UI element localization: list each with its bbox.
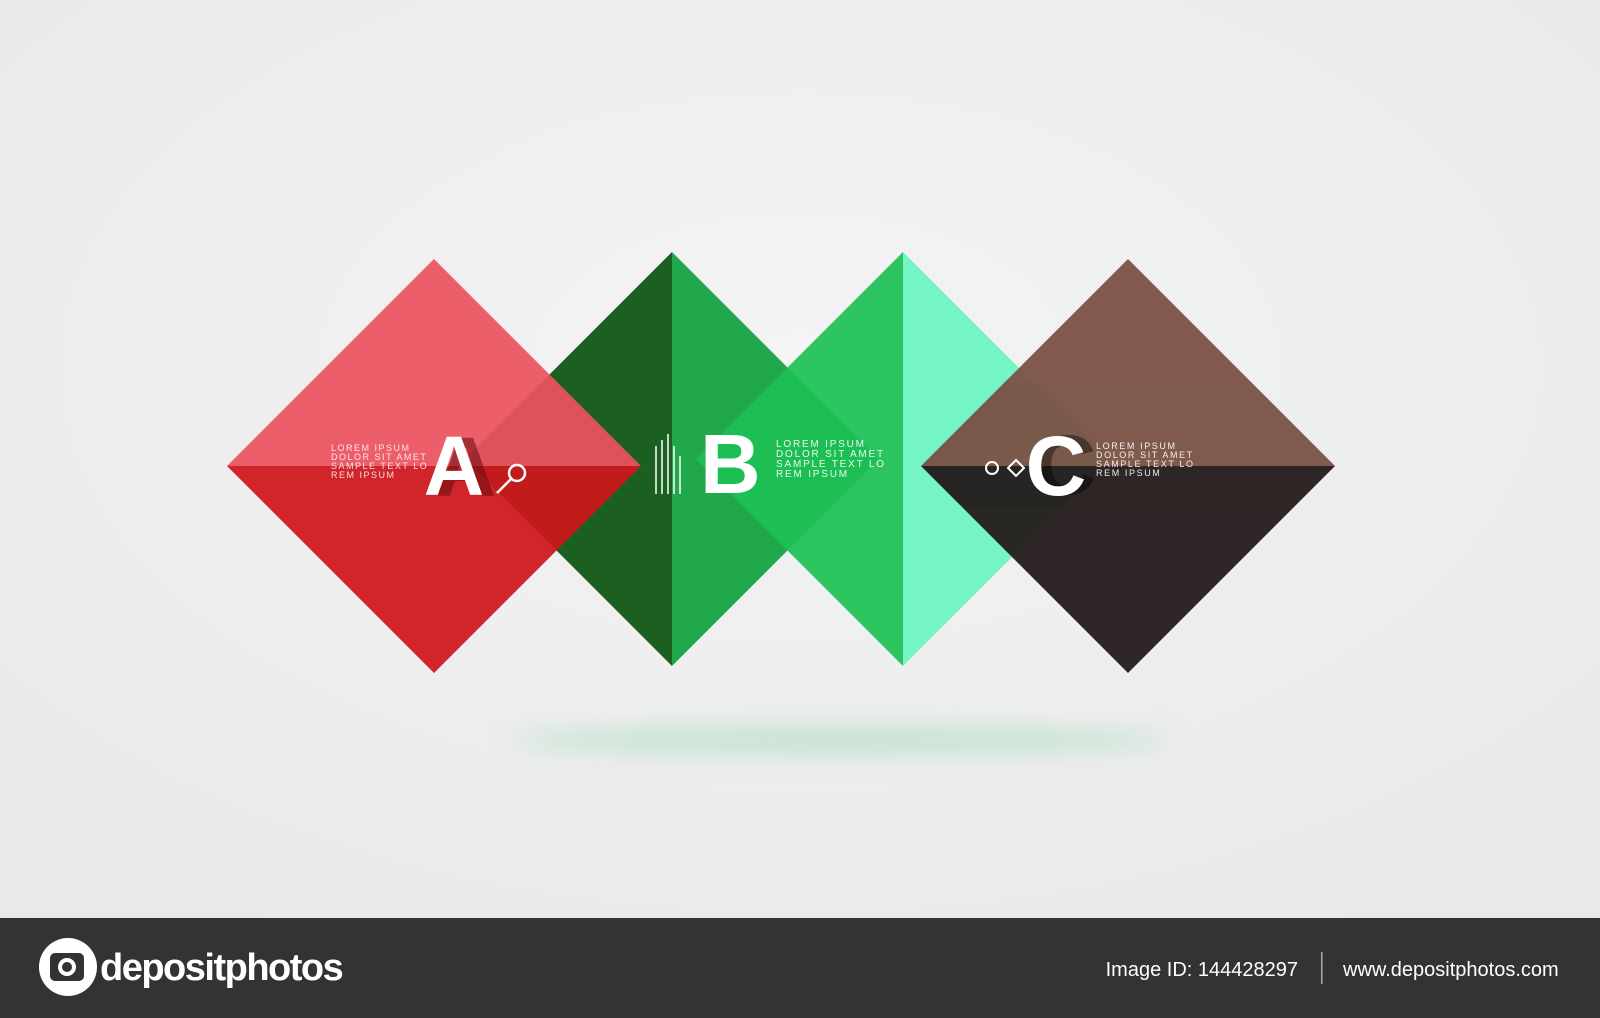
label B block: B bbox=[700, 417, 761, 511]
label B block: LOREM IPSUM bbox=[776, 439, 866, 450]
floor shadow bbox=[510, 726, 1170, 754]
label C block: DOLOR SIT AMET bbox=[1096, 450, 1194, 460]
label A block: A bbox=[424, 419, 484, 513]
label C block: LOREM IPSUM bbox=[1096, 441, 1177, 451]
diamond: brown C bbox=[921, 259, 1335, 673]
footer bar: www.depositphotos.com bbox=[1342, 959, 1559, 981]
label B block bbox=[656, 417, 886, 511]
label B block: SAMPLE TEXT LO bbox=[776, 459, 886, 470]
label A block: A bbox=[436, 420, 496, 514]
label A block: DOLOR SIT AMET bbox=[331, 452, 427, 462]
label C block: REM IPSUM bbox=[1096, 468, 1161, 478]
label C block bbox=[986, 418, 1195, 513]
label C block: C bbox=[1026, 419, 1086, 513]
diamond: light green bbox=[696, 252, 1110, 666]
label A block: LOREM IPSUM bbox=[331, 443, 411, 453]
label C block: SAMPLE TEXT LO bbox=[1096, 459, 1195, 469]
icon: magnifier bbox=[497, 465, 525, 493]
footer bar: depositphotos bbox=[100, 947, 343, 989]
diamond: red A bbox=[227, 259, 641, 673]
label A block: REM IPSUM bbox=[331, 470, 396, 480]
label C block: C bbox=[1036, 418, 1096, 512]
label B block: DOLOR SIT AMET bbox=[776, 449, 885, 460]
icon: logo camera bbox=[39, 938, 97, 996]
footer bar bbox=[0, 918, 1600, 1018]
icon: circle and diamond bbox=[986, 460, 1024, 476]
label A block: SAMPLE TEXT LO bbox=[331, 461, 428, 471]
footer bar: Image ID: 144428297 bbox=[1106, 959, 1298, 981]
icon: bars bbox=[656, 434, 680, 494]
label A block bbox=[331, 419, 525, 514]
label B block: REM IPSUM bbox=[776, 469, 849, 480]
diamond: dark green bbox=[465, 252, 879, 666]
